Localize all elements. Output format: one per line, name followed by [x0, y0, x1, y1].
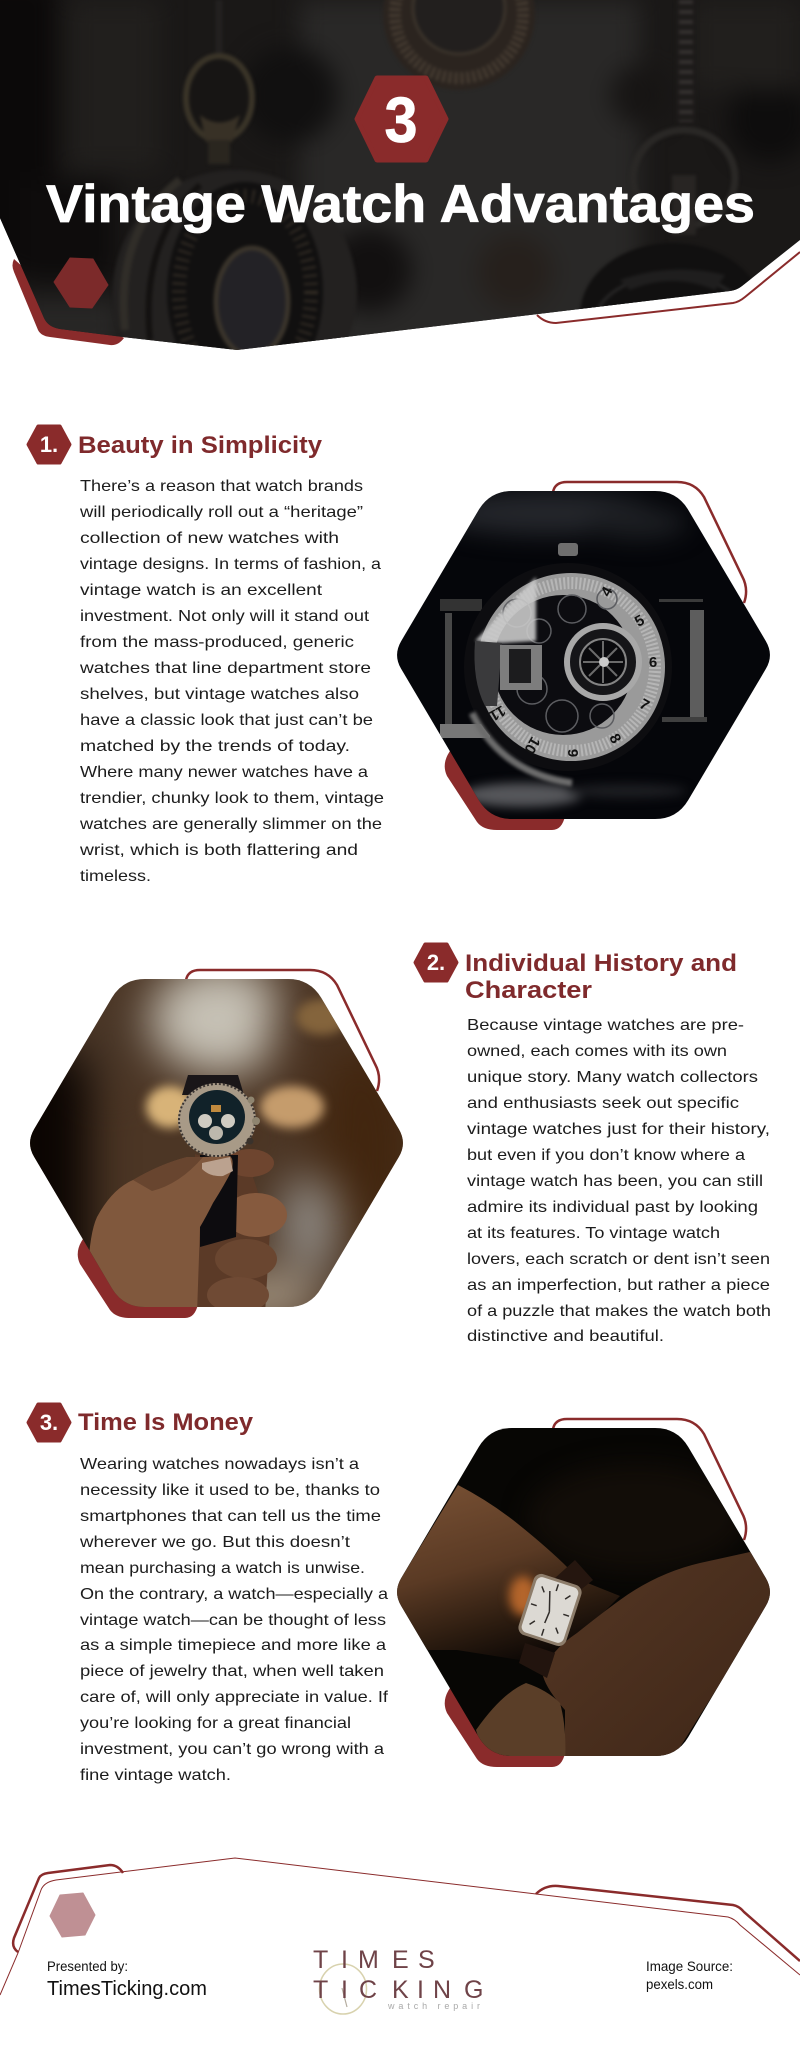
photo: skeleton watch in hexagon: 10 — [520, 734, 543, 757]
badge 3 — [28, 1404, 70, 1441]
footer — [0, 1858, 800, 2014]
body text 1: will periodically roll out a “heritage” — [79, 504, 363, 521]
header photo of pocket watches — [0, 0, 800, 350]
body text 3: smartphones that can tell us the time — [80, 1508, 381, 1525]
badge: number 3: 3 — [384, 84, 418, 156]
section 3: Time Is Money — [28, 1404, 777, 1784]
photo: skeleton watch in hexagon: 8 — [605, 731, 624, 747]
presented by: TimesTicking.com — [47, 1978, 207, 2000]
image source: Image Source: — [646, 1958, 733, 1974]
strap — [200, 1155, 238, 1247]
body text 2: at its features. To vintage watch — [467, 1225, 720, 1242]
photo: skeleton watch in hexagon: 6 — [649, 654, 657, 671]
badge 1: 1. — [40, 432, 58, 457]
image source: pexels.com — [646, 1976, 713, 1992]
body text 2: as an imperfection, but rather a piece — [467, 1277, 770, 1294]
body text 3: fine vintage watch. — [80, 1767, 231, 1784]
accent: small hexagon — [54, 258, 108, 308]
body text 2: distinctive and beautiful. — [467, 1328, 664, 1345]
body text 3: Wearing watches nowadays isn’t a — [80, 1456, 359, 1473]
body text 3: piece of jewelry that, when well taken — [80, 1663, 384, 1680]
body text 1: wrist, which is both flattering and — [79, 842, 358, 859]
footer thin outline — [0, 1858, 800, 1995]
watch — [182, 1075, 244, 1095]
body text 2: unique story. Many watch collectors — [467, 1069, 758, 1086]
photo: skeleton watch in hexagon: 5 — [632, 612, 648, 631]
body text 2: owned, each comes with its own — [467, 1043, 727, 1060]
body text 2: and enthusiasts seek out specific — [467, 1095, 739, 1112]
body text 1: timeless. — [80, 868, 151, 885]
body text 1: watches that line department store — [79, 660, 371, 677]
logo: Times Ticking watch repair — [313, 1946, 483, 2014]
icon: pink hexagon — [50, 1893, 95, 1937]
badge 1 — [28, 426, 70, 463]
strap lugs — [440, 599, 482, 611]
photo: skeleton watch in hexagon: 4 — [598, 583, 617, 600]
body text 2: vintage watch has been, you can still — [467, 1173, 763, 1190]
body text 3 — [79, 1456, 389, 1784]
body text 1: vintage designs. In terms of fashion, a — [80, 556, 381, 573]
body text 1: collection of new watches with — [80, 530, 339, 547]
title: Vintage Watch Advantages — [46, 175, 755, 234]
accent: header red corner — [12, 259, 124, 345]
image source — [646, 1958, 733, 1992]
logo: Times Ticking watch repair: watch repair — [387, 2001, 480, 2011]
palm and thumb — [88, 1156, 233, 1314]
photo: wrist watch in hexagon — [389, 1419, 777, 1767]
body text 3: care of, will only appreciate in value. If — [80, 1689, 389, 1706]
heading 2: Individual History and — [465, 950, 737, 977]
header: photo banner — [0, 0, 800, 350]
body text 2: admire its individual past by looking — [467, 1199, 758, 1216]
body text 1: shelves, but vintage watches also — [80, 686, 359, 703]
heading 2: Character — [465, 977, 592, 1004]
photo: skeleton watch in hexagon — [392, 482, 777, 830]
logo: Times Ticking watch repair: TICKING — [313, 1976, 483, 2004]
body text 3: investment, you can’t go wrong with a — [80, 1741, 384, 1758]
section 2: Individual History and Character — [0, 944, 771, 1345]
body text 2: vintage watches just for their history, — [467, 1121, 770, 1138]
body text 2: of a puzzle that makes the watch both — [467, 1303, 771, 1320]
badge 3: 3. — [40, 1410, 58, 1435]
badge: number 3 — [357, 78, 446, 160]
body text 1 — [79, 478, 384, 885]
right chain and pocket watch — [580, 0, 752, 309]
body text 3: necessity like it used to be, thanks to — [80, 1482, 380, 1499]
body text 1: Where many newer watches have a — [80, 764, 368, 781]
heading 3: Time Is Money — [78, 1409, 254, 1436]
body text 1: There’s a reason that watch brands — [80, 478, 363, 495]
watch — [555, 1560, 593, 1590]
footer thick accents — [13, 1865, 800, 1961]
body text 2: but even if you don’t know where a — [467, 1147, 745, 1164]
accent: header thin red line — [537, 252, 800, 323]
badge 2 — [415, 944, 457, 981]
logo: Times Ticking watch repair: TIMES — [313, 1946, 435, 1974]
body text 3: as a simple timepiece and more like a — [80, 1637, 386, 1654]
photo: hand holding chronograph in hexagon — [30, 968, 403, 1318]
big left pocket watch — [114, 172, 356, 350]
photo: skeleton watch in hexagon: 9 — [564, 749, 581, 757]
sweater — [543, 1546, 777, 1763]
body text 3: wherever we go. But this doesn’t — [79, 1534, 351, 1551]
body text 2: Because vintage watches are pre- — [467, 1017, 744, 1034]
skeleton wheels — [503, 589, 617, 732]
section 1: Beauty in Simplicity — [28, 426, 777, 885]
body text 3: you’re looking for a great financial — [80, 1715, 351, 1732]
body text 3: vintage watch—can be thought of less — [80, 1612, 386, 1629]
left pendant — [186, 0, 252, 164]
heading 1: Beauty in Simplicity — [78, 432, 323, 459]
photo: skeleton watch in hexagon: 7 — [636, 696, 652, 715]
photo: skeleton watch in hexagon: 11 — [486, 702, 508, 724]
body text 1: investment. Not only will it stand out — [80, 608, 370, 625]
body text 2 — [467, 1017, 771, 1345]
body text 1: vintage watch is an excellent — [80, 582, 323, 599]
body text 1: trendier, chunky look to them, vintage — [80, 790, 384, 807]
body text 1: have a classic look that just can’t be — [80, 712, 373, 729]
body text 1: watches are generally slimmer on the — [79, 816, 382, 833]
badge 2: 2. — [427, 950, 445, 975]
heading 2 — [465, 950, 737, 1004]
top watch — [383, 0, 535, 90]
arm — [397, 1485, 620, 1660]
body text 3: mean purchasing a watch is unwise. — [80, 1560, 365, 1577]
body text 1: from the mass-produced, generic — [80, 634, 354, 651]
fingers — [195, 1154, 270, 1314]
presented by — [47, 1958, 207, 2000]
body text 2: lovers, each scratch or dent isn’t seen — [467, 1251, 770, 1268]
body text 3: On the contrary, a watch—especially a — [80, 1586, 388, 1603]
body text 1: matched by the trends of today. — [80, 738, 350, 755]
presented by: Presented by: — [47, 1958, 128, 1974]
